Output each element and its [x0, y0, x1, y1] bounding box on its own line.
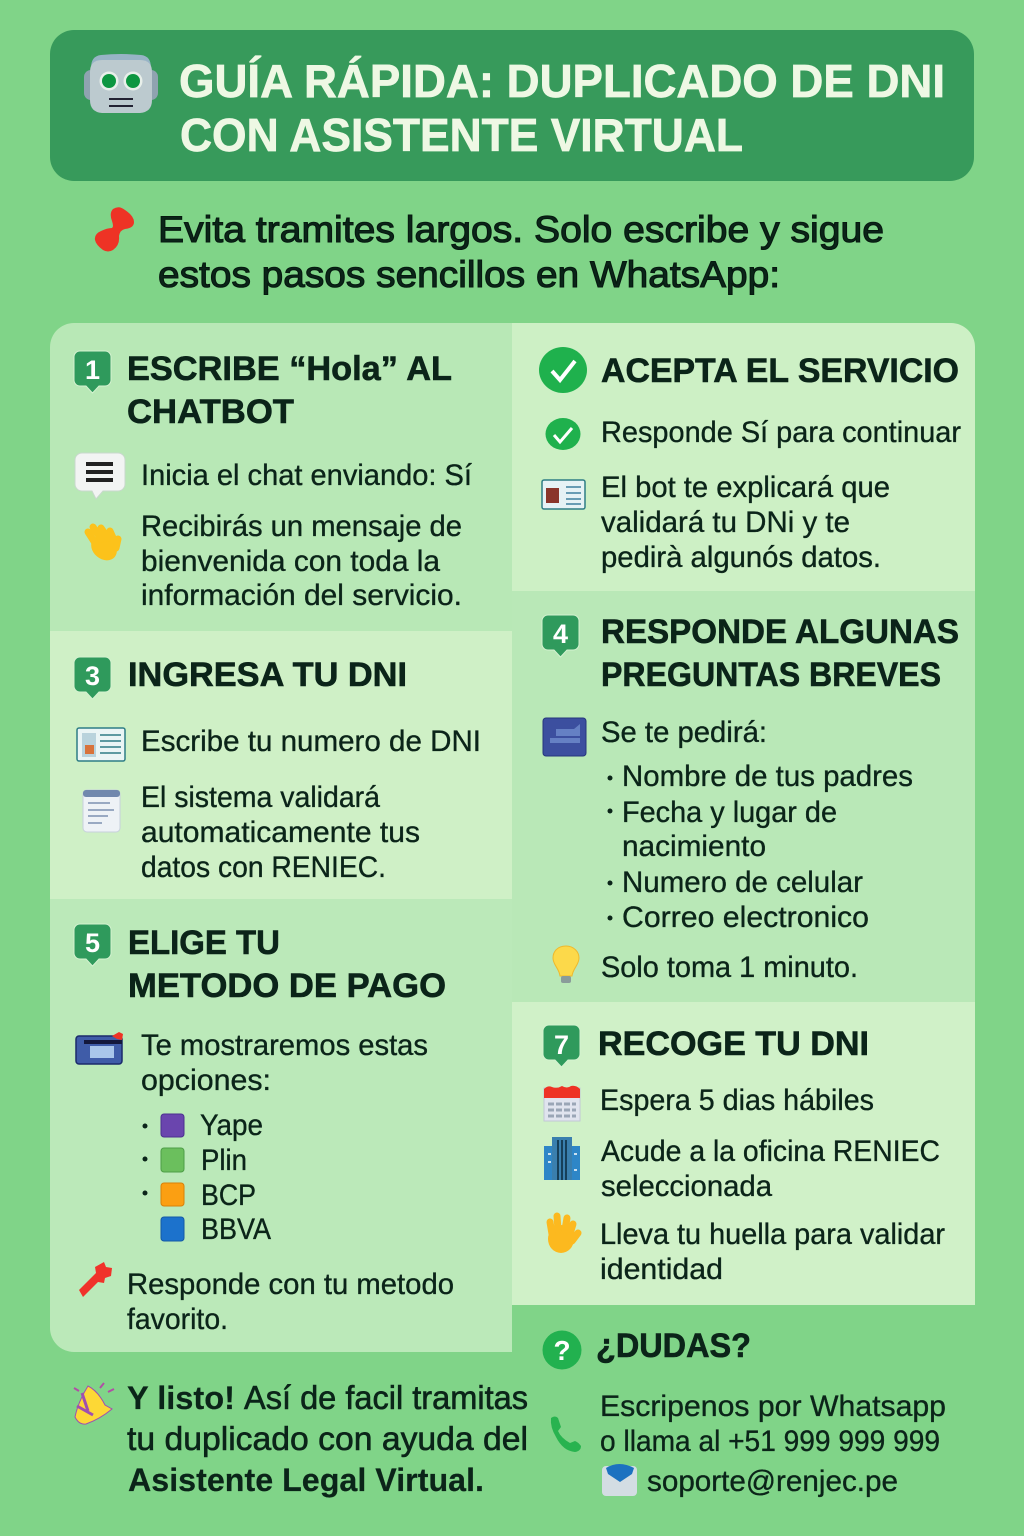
text: Lleva tu huella para validar	[600, 1218, 945, 1251]
title	[179, 55, 945, 161]
intro text: estos pasos sencillos en WhatsApp:	[158, 254, 780, 295]
text	[141, 781, 420, 884]
badge 1	[74, 351, 111, 393]
title: GUÍA RÁPIDA: DUPLICADO DE DNI	[179, 55, 945, 107]
intro text: Evita tramites largos. Solo escribe y sigue	[158, 209, 884, 250]
badge 3: 3	[85, 661, 100, 691]
heading: CHATBOT	[127, 393, 294, 431]
text: favorito.	[127, 1303, 228, 1336]
icon: red pin small	[79, 1262, 112, 1297]
panel: step 5	[50, 899, 512, 1352]
badge 1: 1	[85, 355, 100, 385]
payment options list	[142, 1109, 271, 1246]
intro text	[158, 209, 884, 295]
text: Escribe tu numero de DNI	[141, 725, 481, 758]
closing message: Así de facil tramitas	[244, 1379, 528, 1416]
text: Se te pedirá:	[601, 716, 767, 749]
icon: blue form	[543, 718, 586, 756]
text	[141, 1029, 428, 1097]
icon: raised hand	[548, 1216, 578, 1253]
heading: PREGUNTAS BREVES	[601, 656, 941, 694]
requested data list: Correo electronico	[622, 901, 869, 934]
badge 5: 5	[85, 928, 100, 958]
icon: payment card	[76, 1032, 123, 1064]
text: datos con RENIEC.	[141, 851, 386, 884]
text: pedirà algunós datos.	[601, 541, 881, 574]
text: Espera 5 dias hábiles	[600, 1084, 874, 1117]
heading: ESCRIBE “Hola” AL	[127, 350, 452, 388]
requested data list: nacimiento	[622, 830, 766, 863]
text: El sistema validará	[141, 781, 380, 814]
icon: check small	[546, 418, 580, 450]
heading: ¿DUDAS?	[596, 1327, 751, 1365]
text: información del servicio.	[141, 579, 462, 612]
text	[601, 471, 890, 574]
contact text: o llama al +51 999 999 999	[600, 1425, 940, 1458]
header banner	[50, 30, 974, 181]
contact text: Escripenos por Whatsapp	[600, 1390, 946, 1423]
icon: robot	[84, 54, 158, 113]
icon: id card	[542, 480, 585, 509]
requested data list: Fecha y lugar de	[622, 796, 837, 829]
text	[600, 1218, 945, 1286]
icon: question: ?	[553, 1335, 571, 1366]
heading	[128, 924, 446, 1005]
text: seleccionada	[601, 1170, 772, 1203]
icon: document	[83, 790, 120, 832]
closing message	[74, 1379, 528, 1498]
heading: RESPONDE ALGUNAS	[601, 613, 959, 651]
text: bienvenida con toda la	[141, 545, 440, 578]
panel: step 1	[50, 323, 512, 631]
text: Te mostraremos estas	[141, 1029, 428, 1062]
text: Solo toma 1 minuto.	[601, 951, 858, 984]
badge 5	[74, 924, 111, 966]
panel: step 3	[50, 631, 512, 899]
closing message: tu duplicado con ayuda del	[127, 1420, 528, 1457]
text: opciones:	[141, 1064, 271, 1097]
text: El bot te explicará que	[601, 471, 890, 504]
panel: step 7	[512, 1002, 975, 1305]
icon: check large	[539, 347, 587, 393]
payment options list: Plin	[201, 1144, 247, 1177]
panel: step 2	[512, 323, 975, 591]
title: CON ASISTENTE VIRTUAL	[180, 109, 743, 161]
text: Inicia el chat enviando: Sí	[141, 459, 473, 492]
text: Responde con tu metodo	[127, 1268, 454, 1301]
icon: waving hand	[86, 527, 122, 565]
payment options list: BBVA	[201, 1213, 271, 1246]
text: Recibirás un mensaje de	[141, 510, 462, 543]
heading: RECOGE TU DNI	[598, 1025, 869, 1063]
text: Acude a la oficina RENIEC	[601, 1135, 940, 1168]
heading: ELIGE TU	[128, 924, 280, 962]
text: validará tu DNi y te	[601, 506, 850, 539]
heading: ACEPTA EL SERVICIO	[601, 352, 959, 390]
icon: calendar	[544, 1086, 580, 1121]
heading: METODO DE PAGO	[128, 967, 446, 1005]
help section	[542, 1327, 946, 1498]
closing message: Y listo!	[127, 1380, 235, 1416]
badge 7: 7	[554, 1030, 569, 1060]
heading: INGRESA TU DNI	[128, 656, 407, 694]
text: identidad	[600, 1253, 723, 1286]
badge 4: 4	[553, 619, 568, 649]
text: Responde Sí para continuar	[601, 416, 961, 449]
icon: envelope	[602, 1464, 637, 1496]
text	[141, 510, 462, 612]
icon: light bulb	[553, 946, 579, 983]
icon: phone	[551, 1416, 581, 1452]
text	[601, 1135, 940, 1203]
badge 7	[543, 1025, 580, 1067]
heading	[127, 350, 452, 431]
contact text	[600, 1390, 946, 1498]
heading	[601, 613, 959, 694]
payment options list: BCP	[201, 1179, 256, 1212]
text	[127, 1268, 454, 1336]
requested data list	[608, 760, 913, 934]
icon: question	[542, 1330, 582, 1370]
panel: step 4	[512, 591, 975, 1002]
requested data list: Numero de celular	[622, 866, 863, 899]
requested data list: Nombre de tus padres	[622, 760, 913, 793]
icon: red pin	[95, 207, 134, 252]
icon: party popper	[74, 1383, 114, 1424]
icon: office building	[544, 1137, 580, 1180]
badge 3	[74, 657, 111, 699]
contact text: soporte@renjec.pe	[647, 1465, 898, 1498]
icon: id card	[77, 728, 125, 761]
payment options list: Yape	[200, 1109, 263, 1142]
text: automaticamente tus	[141, 816, 420, 849]
icon: chat bubble	[75, 453, 125, 499]
badge 4	[542, 615, 579, 657]
closing message: Asistente Legal Virtual.	[128, 1462, 484, 1498]
